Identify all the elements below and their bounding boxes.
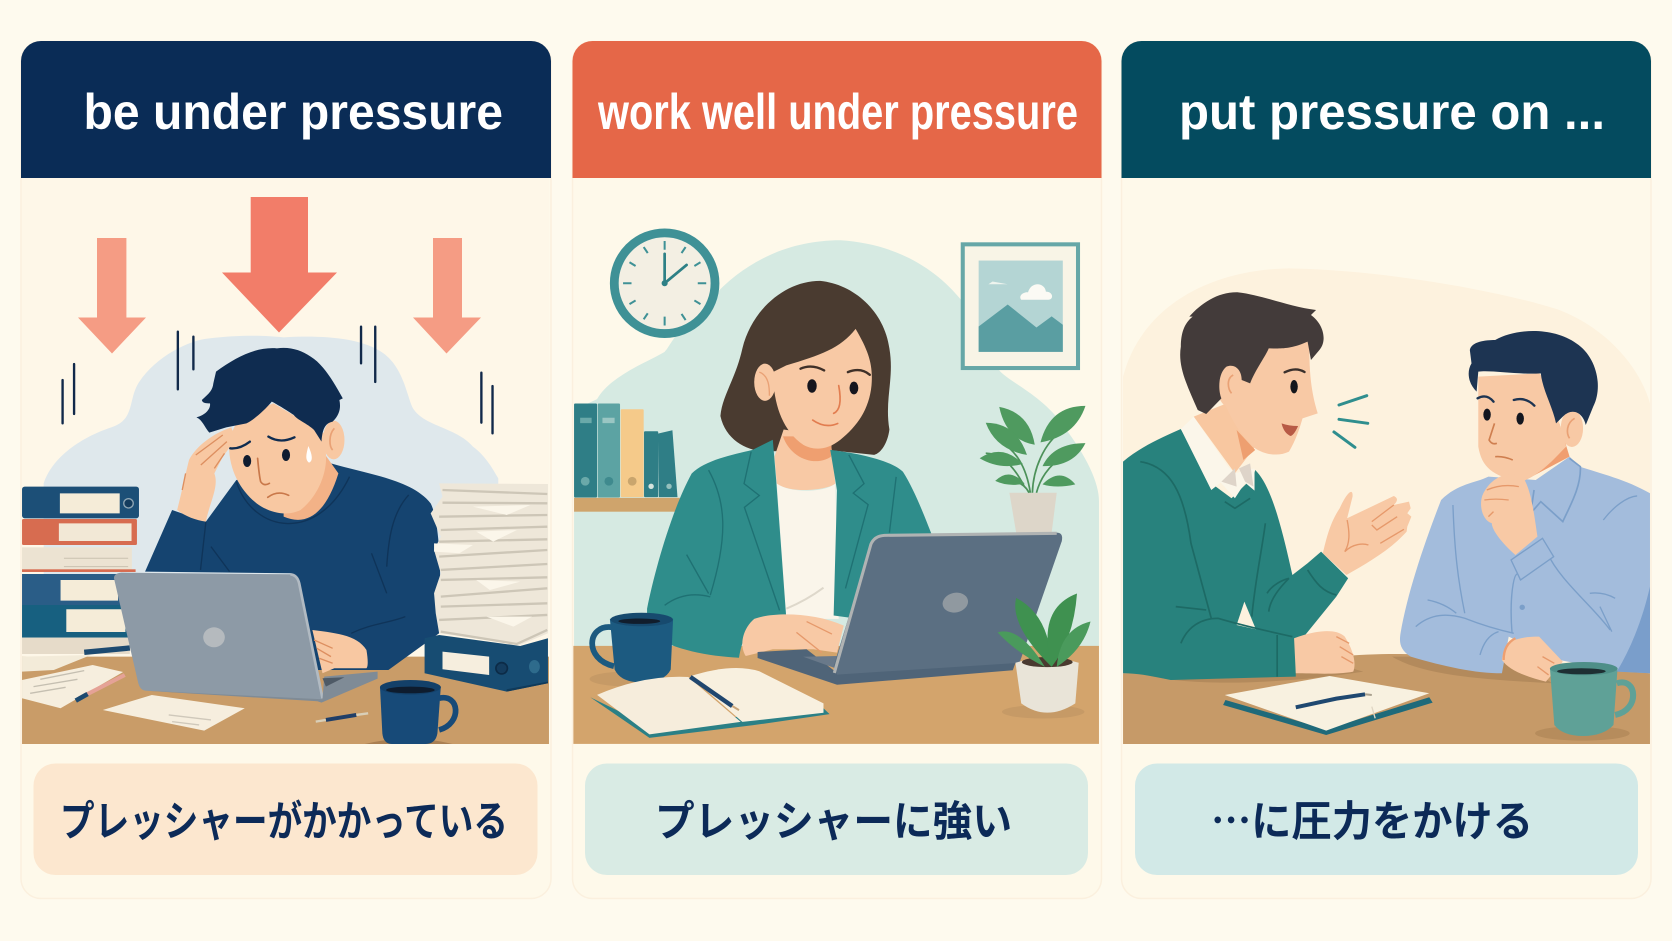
heading bar: be under pressure: be under pressure <box>84 84 503 140</box>
listening man <box>1400 331 1650 682</box>
pill: Japanese meaning <box>34 764 538 875</box>
woman <box>647 281 932 658</box>
icon: large pressure arrow <box>222 197 337 332</box>
hand on chin <box>1481 474 1537 555</box>
framed picture <box>963 244 1078 368</box>
stack of papers <box>431 483 548 645</box>
heading bar: be under pressure <box>21 41 551 178</box>
sweater <box>145 463 440 670</box>
pill: Japanese meaning: プレッシャーに強い <box>655 798 1012 845</box>
speech lines <box>1334 396 1368 447</box>
laptop <box>758 533 1062 685</box>
illustration: calm woman at laptop <box>573 233 1099 744</box>
coffee mug <box>365 680 456 744</box>
small plant on desk <box>998 593 1091 719</box>
heading bar: put pressure on: put pressure on ... <box>1179 84 1605 140</box>
illustration background: be under pressure <box>22 178 549 744</box>
pill: Japanese meaning <box>585 764 1088 875</box>
coffee mug <box>590 613 673 686</box>
hand on laptop <box>312 630 368 673</box>
speaking man <box>1123 292 1348 680</box>
panel: put pressure on <box>1122 41 1651 898</box>
icon: right pressure arrow <box>413 238 481 354</box>
books on shelf <box>574 404 680 512</box>
panel: be under pressure <box>21 41 551 898</box>
heading bar: put pressure on <box>1122 41 1651 178</box>
heading bar: work well under pressure: work well under pressure <box>597 84 1078 140</box>
laptop <box>114 573 323 701</box>
illustration: two men talking <box>1123 268 1650 744</box>
open hand gesture <box>1294 492 1411 674</box>
icon: left pressure arrow <box>78 238 146 354</box>
raised hand <box>177 427 233 522</box>
panel: work well under pressure <box>572 41 1102 898</box>
coffee mug <box>1535 662 1633 741</box>
pen <box>316 713 368 722</box>
pill: Japanese meaning <box>1135 764 1638 875</box>
binder on right <box>425 635 548 692</box>
heading bar: work well under pressure <box>572 41 1102 178</box>
pill: Japanese meaning: プレッシャーがかかっている <box>60 798 508 845</box>
hand on table <box>1502 637 1563 682</box>
plant on shelf <box>980 406 1085 533</box>
clock <box>614 233 715 334</box>
illustration: stressed man at desk <box>22 327 549 744</box>
open notebook and pen <box>590 668 830 738</box>
hair <box>196 348 343 442</box>
notebook and pen <box>1223 676 1433 735</box>
pill: Japanese meaning: …に圧力をかける <box>1211 788 1533 849</box>
